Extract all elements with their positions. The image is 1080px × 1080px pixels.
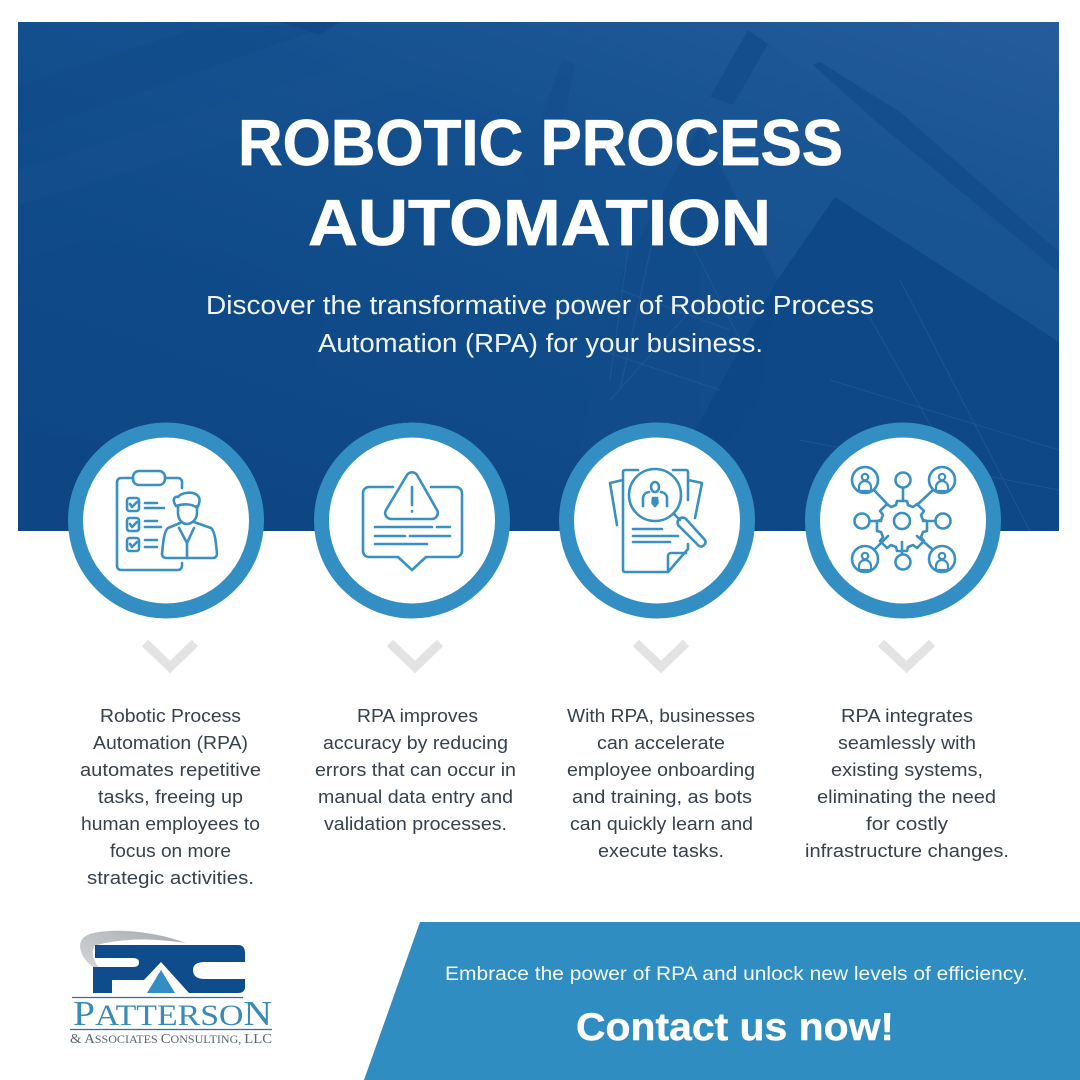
text: column 1: strategic activities. bbox=[87, 867, 254, 888]
hero banner with building photo bbox=[18, 22, 1059, 531]
logo: Patterson & Associates Consulting bbox=[70, 931, 272, 1047]
text: column 1: focus on more bbox=[110, 840, 231, 861]
text: column 2: validation processes. bbox=[324, 813, 507, 834]
logo swoosh bbox=[80, 931, 186, 974]
text: column 4: seamlessly with bbox=[838, 732, 976, 753]
text: column 4: RPA integrates bbox=[841, 705, 973, 726]
text: column 2 bbox=[315, 705, 516, 834]
text: column 3: execute tasks. bbox=[598, 840, 724, 861]
text: column 1: automates repetitive bbox=[80, 759, 261, 780]
text: column 1: Robotic Process bbox=[100, 705, 241, 726]
text: column 1: human employees to bbox=[81, 813, 260, 834]
call to action line: Embrace the power of RPA and unlock new levels of efficiency. bbox=[445, 963, 1028, 985]
text: column 3: can quickly learn and bbox=[570, 813, 753, 834]
title: AUTOMATION bbox=[308, 186, 771, 259]
logo triangle bbox=[147, 970, 175, 993]
text: column 4: eliminating the need bbox=[817, 786, 996, 807]
text: column 3 bbox=[567, 705, 755, 861]
text: column 3: and training, as bots bbox=[572, 786, 752, 807]
logo PAC monogram bbox=[93, 945, 245, 993]
icon: gear with people nodes bbox=[852, 467, 955, 572]
text: column 1: Automation (RPA) bbox=[93, 732, 248, 753]
circle: checklist employee bbox=[76, 430, 256, 611]
text: column 4: infrastructure changes. bbox=[805, 840, 1009, 861]
subtitle bbox=[206, 292, 874, 358]
text: column 4: for costly bbox=[866, 813, 949, 834]
text: column 3: can accelerate bbox=[597, 732, 725, 753]
title bbox=[238, 106, 843, 259]
icon: warning speech box bbox=[363, 472, 462, 570]
circle: connected gear network bbox=[812, 430, 994, 611]
logo tagline: & ASSOCIATES CONSULTING, LLC bbox=[70, 1032, 272, 1047]
text: column 4 bbox=[805, 705, 1009, 861]
text: column 2: accuracy by reducing bbox=[323, 732, 508, 753]
text: column 2: manual data entry and bbox=[318, 786, 513, 807]
call to action band bbox=[364, 922, 1080, 1080]
text: column 2: RPA improves bbox=[357, 705, 478, 726]
text: column 1: tasks, freeing up bbox=[98, 786, 243, 807]
title: ROBOTIC PROCESS bbox=[238, 106, 843, 179]
circle: document search bbox=[566, 430, 748, 611]
icon: clipboard with employee bbox=[117, 471, 217, 570]
text: column 3: employee onboarding bbox=[567, 759, 755, 780]
contact heading: Contact us now! bbox=[576, 1006, 894, 1049]
logo wordmark: PATTERSO N bbox=[73, 994, 272, 1033]
text: column 4: existing systems, bbox=[831, 759, 983, 780]
circle: alert message bbox=[322, 430, 502, 611]
subtitle: Discover the transformative power of Robotic Process bbox=[206, 292, 874, 320]
chevron arrows bbox=[145, 643, 932, 667]
text: column 1 bbox=[80, 705, 261, 888]
icon: resume and magnifier bbox=[610, 469, 705, 572]
text: column 2: errors that can occur in bbox=[315, 759, 516, 780]
text: column 3: With RPA, businesses bbox=[567, 705, 755, 726]
logo rules bbox=[70, 998, 272, 1030]
subtitle: Automation (RPA) for your business. bbox=[318, 330, 763, 358]
